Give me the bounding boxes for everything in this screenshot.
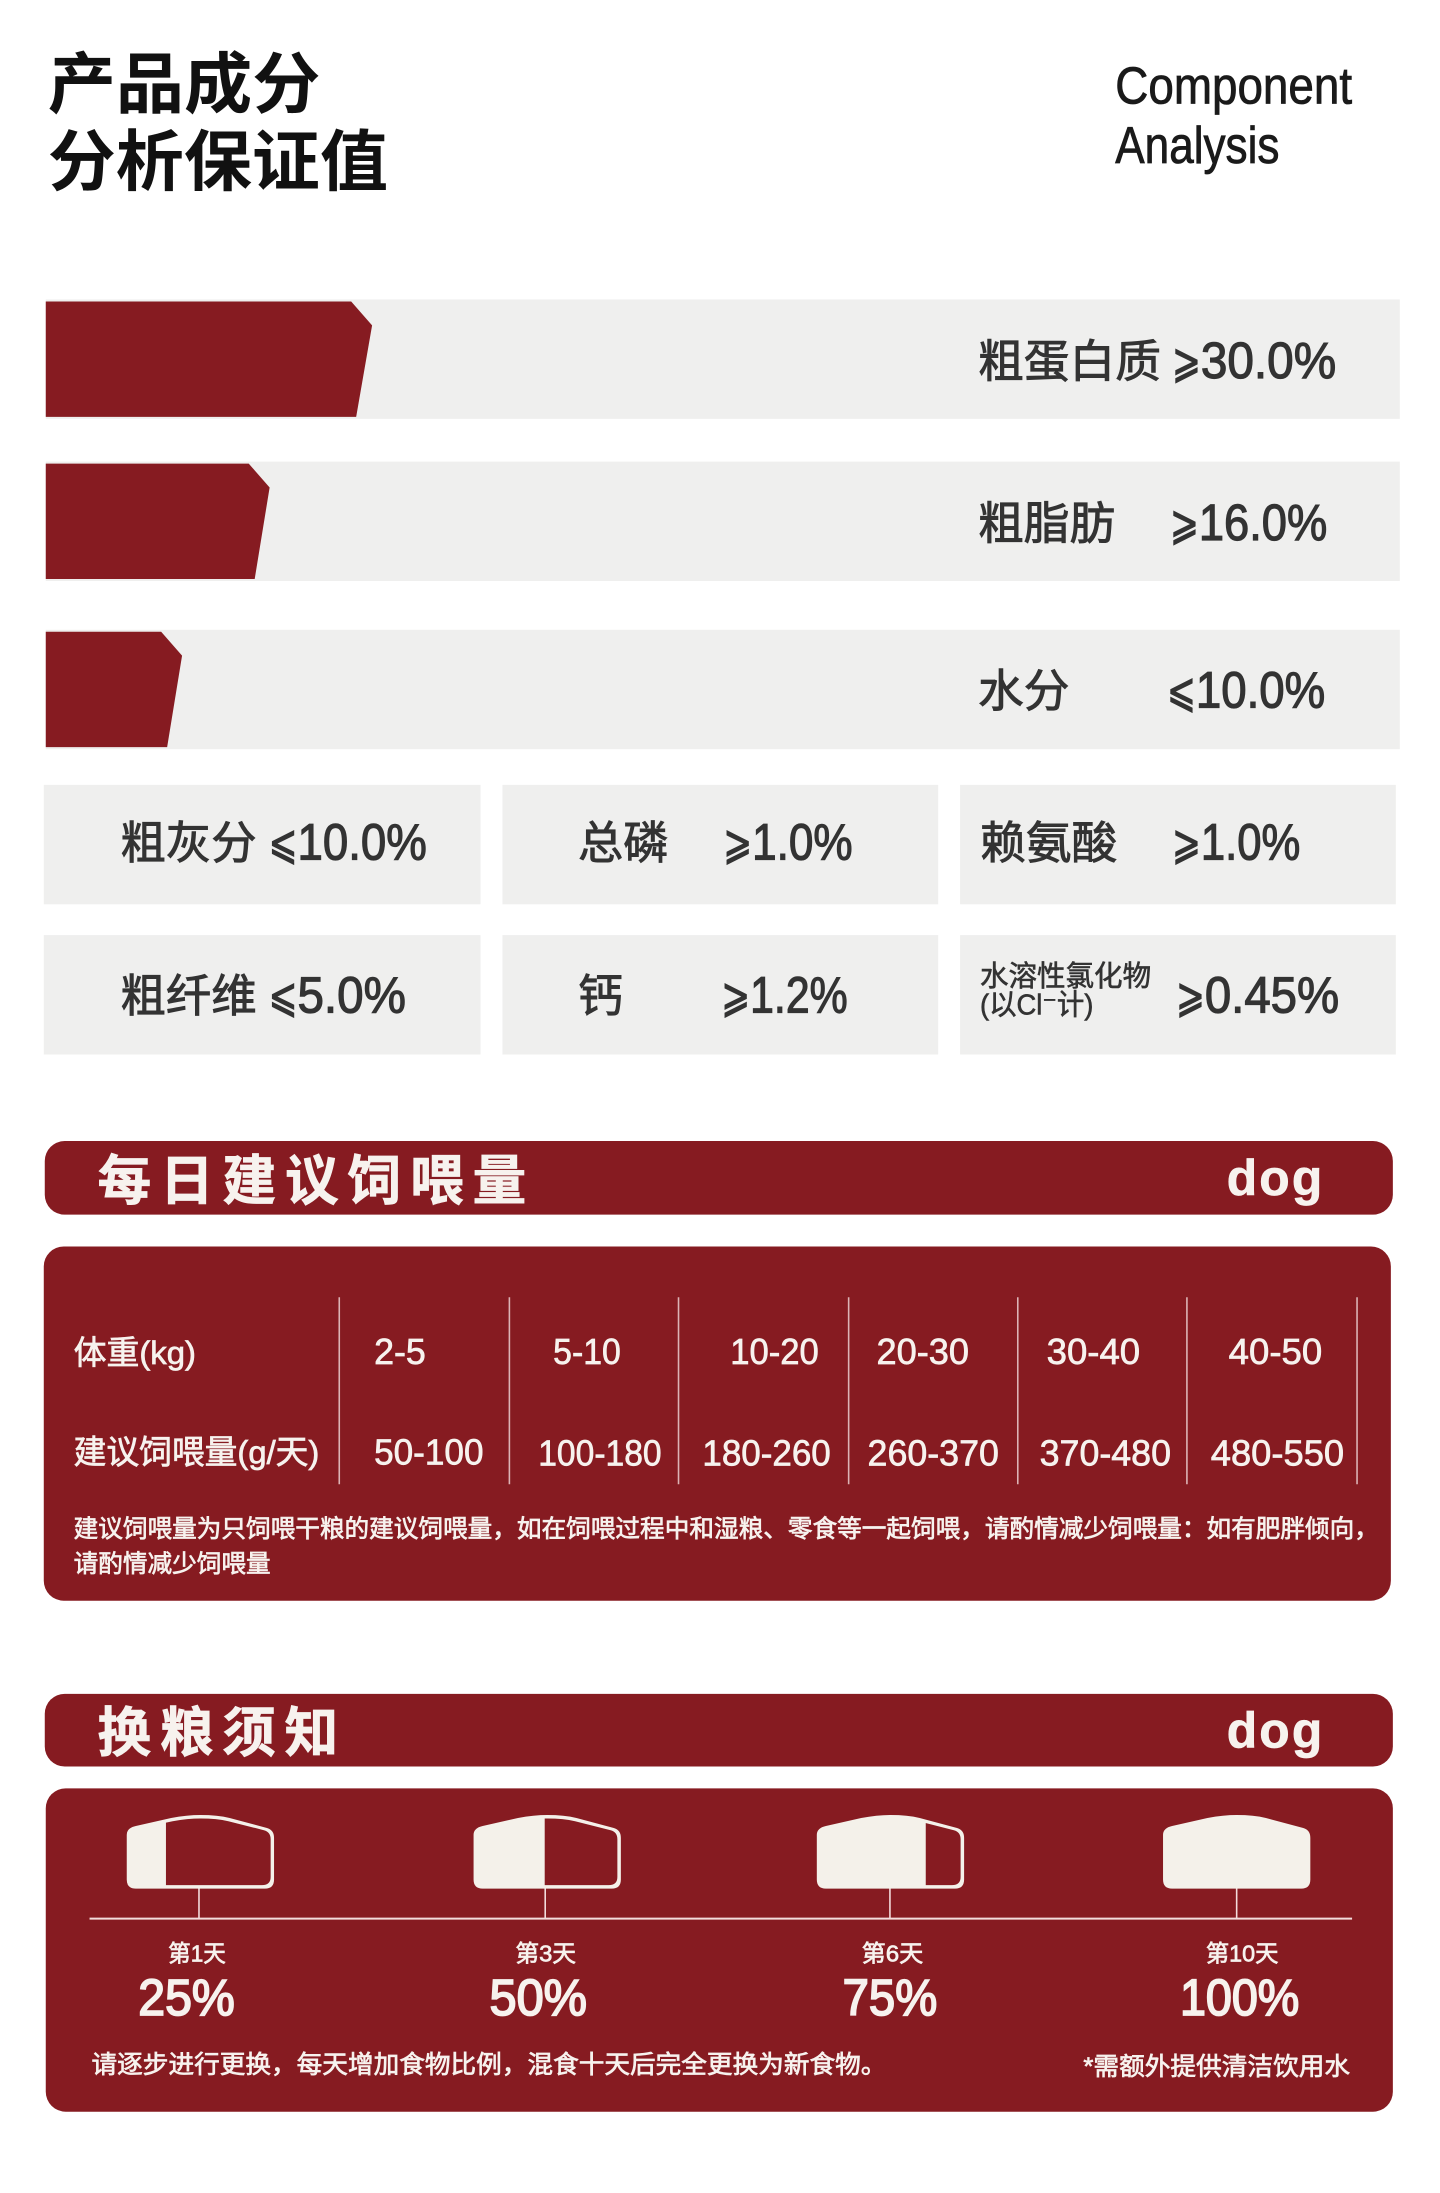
heading: daily feeding: 每日建议饲喂量	[98, 1152, 526, 1212]
panel: crude ash	[44, 785, 481, 904]
row: body weight: 5-10	[553, 1332, 621, 1372]
panel: crude fiber	[44, 935, 481, 1054]
panel: crude fiber: 5.0%	[297, 967, 406, 1024]
panel: transition timeline	[46, 1788, 1393, 2112]
panel: total phosphorus: 1.0%	[752, 813, 853, 870]
panel: water-soluble chloride: 水溶性氯化物	[980, 961, 1151, 993]
heading: daily feeding: dog	[1227, 1150, 1322, 1206]
title: 产品成分	[48, 48, 320, 122]
panel: calcium	[502, 935, 938, 1054]
water note: *需额外提供清洁饮用水	[1083, 2053, 1350, 2081]
panel: calcium: ⩾	[721, 969, 750, 1024]
panel: calcium: 1.2%	[750, 967, 848, 1024]
panel: lysine: ⩾	[1172, 815, 1201, 870]
row: body weight: 2-5	[374, 1332, 426, 1372]
row: feeding amount: 100-180	[538, 1433, 662, 1473]
subtitle: Component Analysis: Component	[1115, 56, 1352, 114]
title	[48, 48, 388, 200]
panel: lysine	[960, 785, 1396, 904]
row: feeding amount: 260-370	[868, 1433, 999, 1473]
icon: bag 25%	[127, 1815, 274, 1889]
panel: water-soluble chloride: (以Cl⁻计)	[980, 990, 1093, 1022]
icon: bag 75%	[817, 1815, 964, 1889]
row: feeding amount: 建议饲喂量(g/天)	[74, 1433, 319, 1470]
label: 粗脂肪	[978, 499, 1115, 549]
panel: lysine: 赖氨酸	[980, 818, 1117, 868]
panel: lysine: 1.0%	[1201, 813, 1300, 870]
panel: total phosphorus	[502, 785, 938, 904]
row: feeding amount: 50-100	[374, 1432, 484, 1472]
label	[978, 332, 1336, 389]
bar: crude fat	[46, 462, 1400, 581]
label: ⩽	[1167, 663, 1196, 718]
row: body weight: 20-30	[877, 1332, 969, 1372]
row: body weight: 体重(kg)	[74, 1334, 196, 1371]
row: body weight: 10-20	[730, 1332, 819, 1372]
day labels: 第1天	[168, 1940, 226, 1966]
label: ⩾	[1170, 496, 1199, 551]
label	[978, 494, 1327, 551]
day labels: 第3天	[515, 1940, 576, 1966]
percentages: 50%	[489, 1969, 587, 2026]
row: feeding amount: 180-260	[702, 1433, 831, 1473]
row: feeding amount: 480-550	[1211, 1433, 1344, 1473]
bar: crude protein	[46, 299, 1400, 419]
panel: crude ash: 10.0%	[297, 813, 427, 870]
label: 水分	[978, 666, 1070, 716]
panel: water-soluble chloride: 0.45%	[1205, 967, 1339, 1024]
red bar fill	[46, 301, 372, 417]
feeding note: 建议饲喂量为只饲喂干粮的建议饲喂量，如在饲喂过程中和湿粮、零食等一起饲喂，请酌情减少饲喂量：如有肥胖倾向，	[74, 1516, 1379, 1543]
row: feeding amount: 370-480	[1040, 1433, 1171, 1473]
panel: total phosphorus: 总磷	[578, 818, 669, 868]
panel: water-soluble chloride: ⩾	[1176, 969, 1205, 1024]
day labels	[168, 1940, 1278, 1966]
row: body weight: 40-50	[1229, 1332, 1322, 1372]
percentages: 75%	[843, 1969, 937, 2026]
label: ⩾	[1172, 334, 1201, 389]
heading: food transition: dog	[1227, 1703, 1322, 1759]
day labels: 第6天	[862, 1940, 923, 1966]
transition note: 请逐步进行更换，每天增加食物比例，混食十天后完全更换为新食物。	[92, 2051, 886, 2079]
subtitle: Component Analysis: Analysis	[1115, 116, 1279, 174]
percentages: 25%	[138, 1969, 235, 2026]
panel: water-soluble chloride	[960, 935, 1396, 1054]
panel: feeding table	[44, 1247, 1391, 1601]
percentages	[138, 1969, 1299, 2026]
table dividers	[339, 1297, 1357, 1484]
red bar fill	[46, 464, 270, 579]
panel: crude ash: ⩽	[269, 815, 297, 870]
label: 10.0%	[1196, 661, 1325, 718]
row: body weight	[74, 1332, 1322, 1372]
label: 16.0%	[1199, 494, 1327, 551]
panel: total phosphorus: ⩾	[723, 815, 752, 870]
panel: crude fiber: 粗纤维	[120, 972, 257, 1022]
title: 分析保证值	[48, 126, 388, 200]
label	[978, 661, 1325, 718]
label: 粗蛋白质	[978, 337, 1161, 387]
icon: bag 100%	[1163, 1815, 1310, 1889]
day labels: 第10天	[1206, 1940, 1278, 1966]
timeline axis	[90, 1887, 1352, 1919]
bar: moisture	[46, 630, 1400, 749]
icon: bag 50%	[474, 1815, 621, 1889]
heading: daily feeding	[45, 1141, 1393, 1215]
row: body weight: 30-40	[1047, 1332, 1140, 1372]
panel: calcium: 钙	[578, 972, 623, 1022]
feeding note: 请酌情减少饲喂量	[74, 1551, 271, 1578]
subtitle: Component Analysis	[1115, 56, 1352, 174]
row: feeding amount	[74, 1432, 1344, 1473]
heading: food transition	[45, 1694, 1393, 1766]
label: 30.0%	[1201, 332, 1336, 389]
red bar fill	[46, 632, 182, 747]
feeding note	[74, 1516, 1379, 1578]
panel: crude ash: 粗灰分	[120, 818, 257, 868]
percentages: 100%	[1180, 1969, 1299, 2026]
heading: food transition: 换粮须知	[98, 1704, 338, 1764]
panel: crude fiber: ⩽	[269, 969, 297, 1024]
